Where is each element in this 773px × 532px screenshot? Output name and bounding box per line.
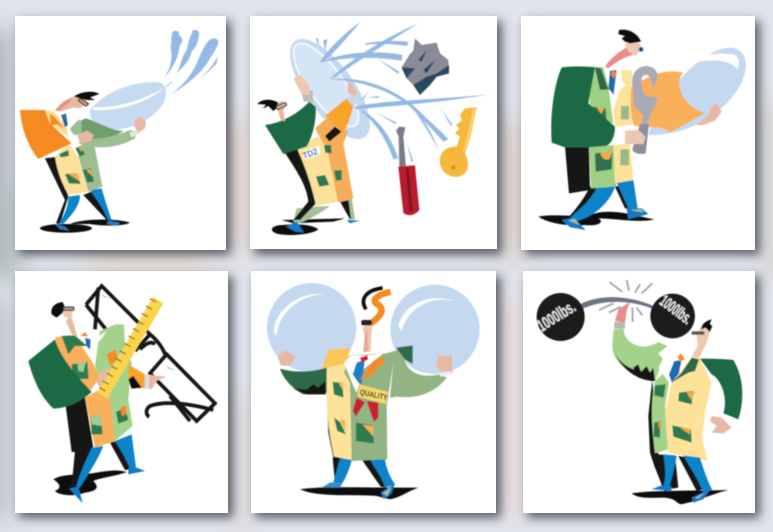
panel 5: strongman holding two bulbs — [251, 271, 501, 518]
label: 1000 lbs left: 1000lbs. — [533, 296, 579, 335]
icon: scientist balancing barbell on one finger — [533, 280, 742, 504]
label: 1000 lbs right: 1000lbs. — [656, 291, 696, 328]
icon: scientist holding leaking bulb — [20, 30, 218, 233]
icon: scientist lifting two bulbs with quality ribbon — [267, 283, 480, 499]
panel 1: inflating balloon bursting at the neck — [15, 16, 231, 255]
panel 2: impact test with rock, screwdriver and key — [250, 16, 502, 255]
icon: scientist measuring glasses with ruler — [28, 286, 215, 503]
panel 4: ruler and oversized glasses — [15, 271, 233, 518]
badge: QUALITY — [357, 384, 388, 404]
panel 3: clamp measuring a bulb — [521, 16, 760, 255]
badge: TD2: TD2 — [301, 146, 319, 161]
panel 6: finger lifting a 1000 lb barbell — [523, 271, 760, 518]
badge: QUALITY: QUALITY — [359, 387, 388, 402]
icon: scientist shielding with plate against flying objects — [257, 22, 492, 235]
icon: scientist squeezing bulb with clamp — [538, 30, 746, 230]
